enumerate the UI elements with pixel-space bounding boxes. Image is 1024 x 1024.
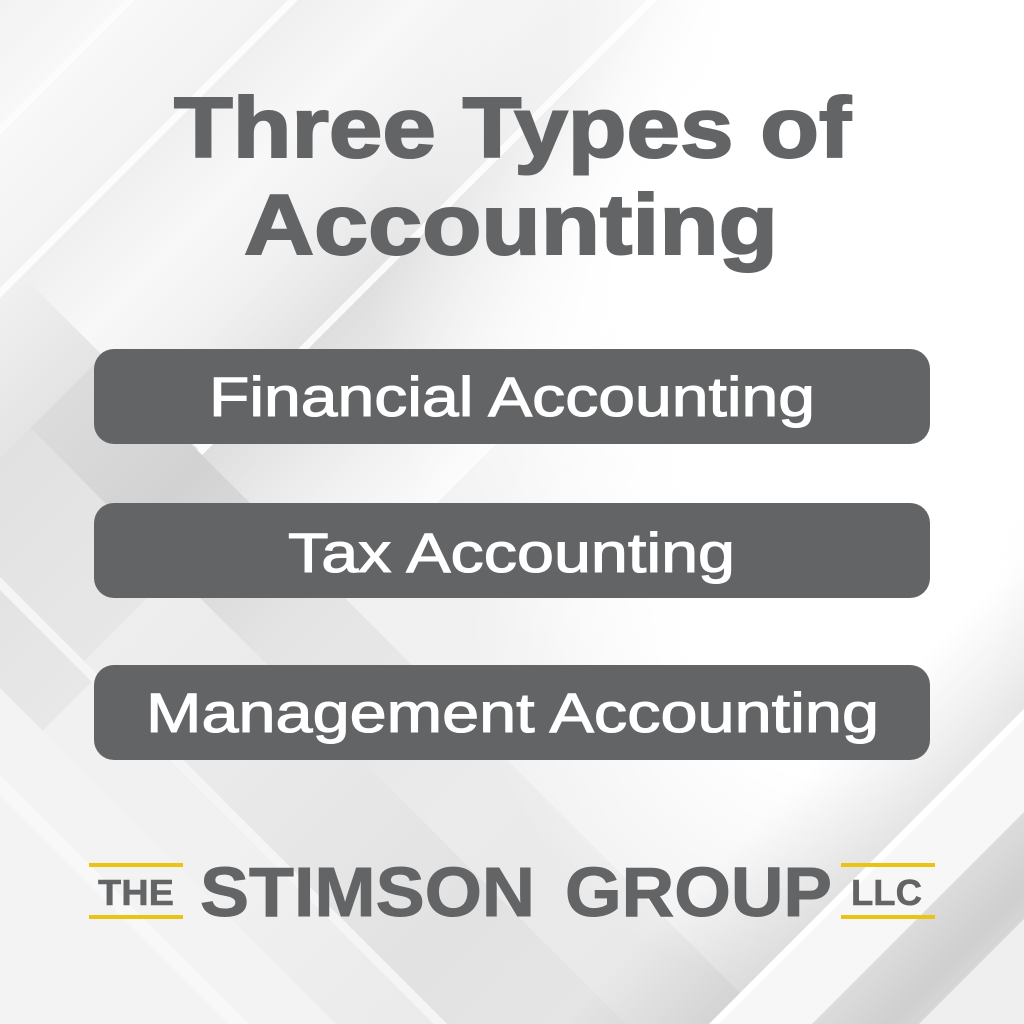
panel: Management Accounting: [94, 665, 930, 760]
logo: The Stimson Group LLC: LLC: [851, 872, 922, 913]
title: [174, 81, 852, 273]
logo: The Stimson Group LLC: GROUP: [565, 853, 832, 931]
panel: Financial Accounting: [94, 349, 930, 444]
logo: The Stimson Group LLC: STIMSON: [200, 853, 535, 931]
panel: Financial Accounting: Financial Accounting: [209, 365, 815, 428]
panel: Tax Accounting: [94, 503, 930, 598]
panel: Management Accounting: Management Accounting: [146, 681, 879, 744]
logo: The Stimson Group LLC: THE: [98, 872, 174, 913]
panel: Tax Accounting: Tax Accounting: [288, 521, 735, 584]
title: Accounting: [244, 178, 778, 273]
logo: The Stimson Group LLC: [89, 853, 935, 931]
title: Three Types of: [174, 81, 852, 176]
